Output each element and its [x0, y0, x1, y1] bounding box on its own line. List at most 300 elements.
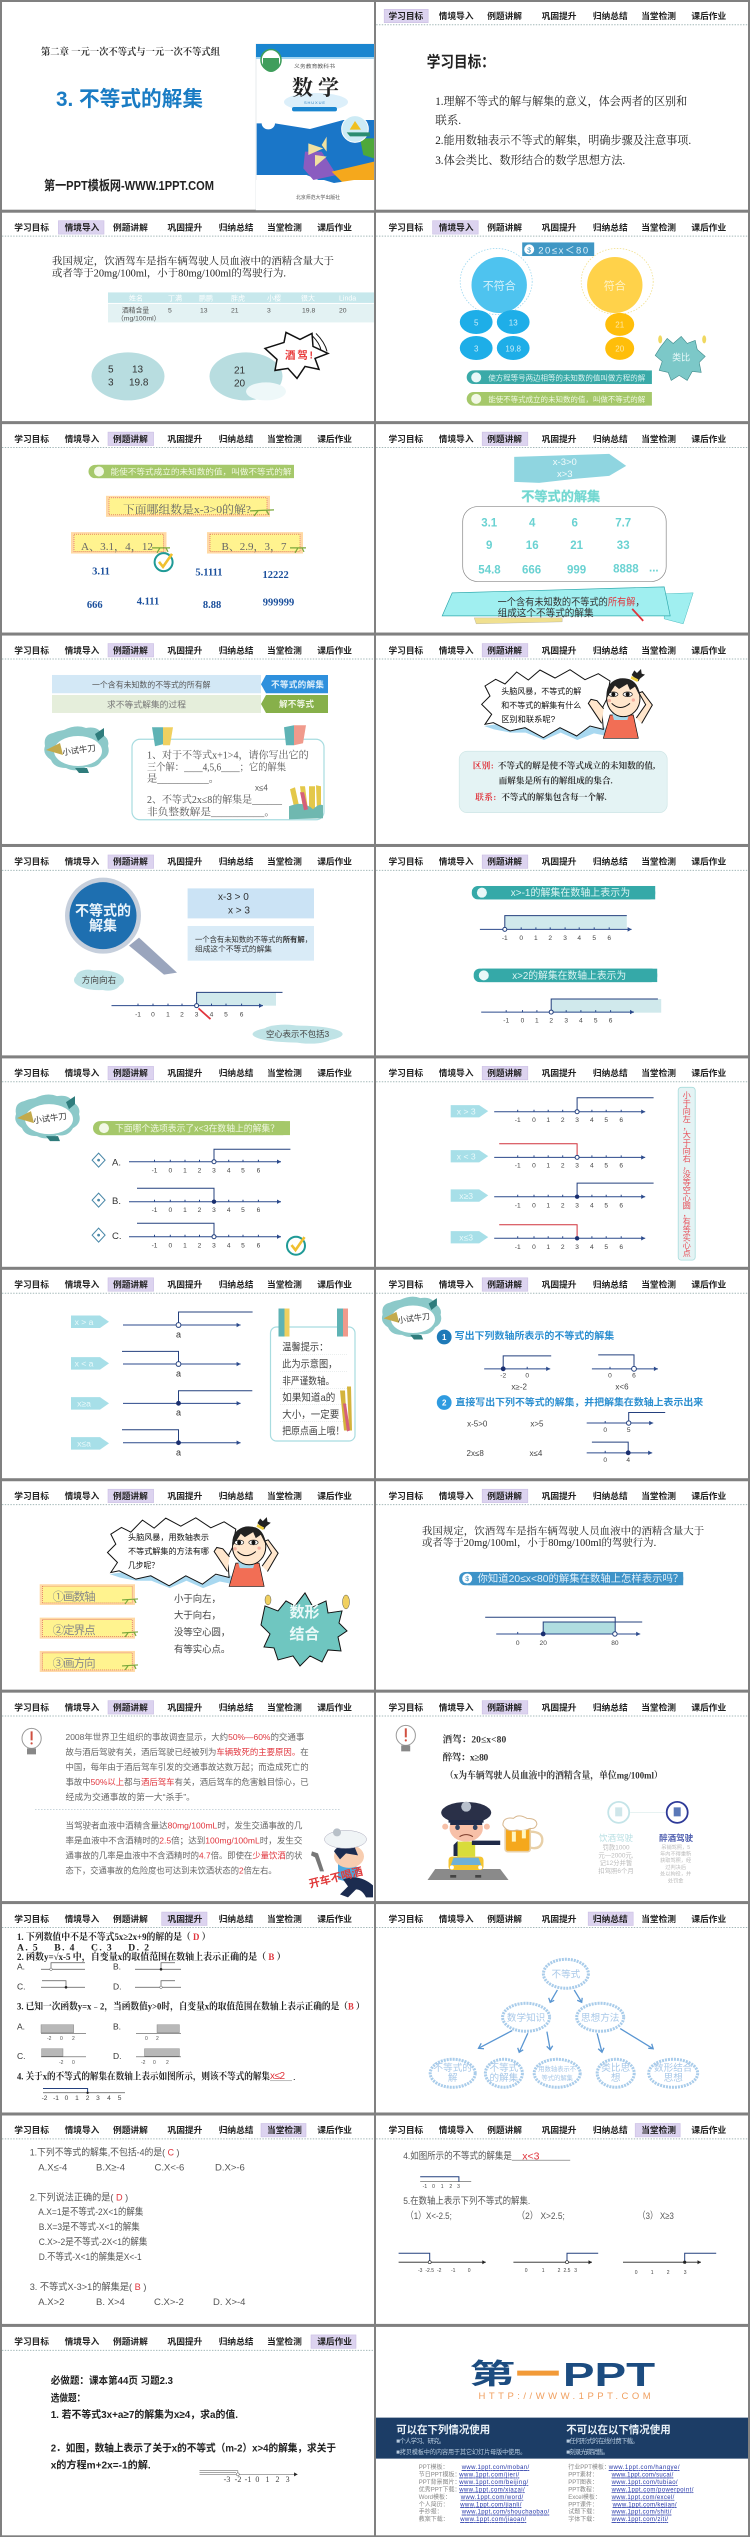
- link list right: PPT图表：: [568, 2478, 598, 2486]
- option A: 4: [227, 1168, 231, 1175]
- number line x greater than 3: 3: [195, 1012, 199, 1019]
- link list right: www.1ppt.com/sucai/: [611, 2473, 674, 2479]
- row: x at least a: x≥a: [77, 1399, 91, 1409]
- badge: try it: [382, 1297, 441, 1339]
- navigation bar: 学习目标: [14, 1490, 49, 1501]
- navigation bar: 学习目标: [389, 10, 424, 21]
- navigation bar: 课后作业: [691, 221, 726, 232]
- number line x at least -2: [484, 1356, 551, 1392]
- circle: matching: 符合: [604, 278, 626, 292]
- panel: slide 24 closing credits: [376, 2327, 748, 2535]
- number line x greater than 3: 5: [224, 1012, 228, 1019]
- node: solution set: [485, 2059, 522, 2087]
- test question 5: （2） X>2.5;: [517, 2210, 565, 2222]
- homework text: [51, 2374, 336, 2471]
- node: math knowledge: 数学知识: [507, 2012, 546, 2024]
- note card with exercises: 非负整数解是__________。: [147, 806, 275, 819]
- navigation bar: [376, 1278, 747, 1293]
- number line x greater than 5: 0: [603, 1427, 607, 1434]
- definitions: [443, 1733, 663, 1781]
- penalty text: drink driving: [598, 1833, 634, 1875]
- panel: slide 9 magnifier solution set: [2, 847, 374, 1055]
- question bar: $: [465, 1576, 469, 1583]
- rounded box of numbers: 9: [486, 540, 492, 552]
- number line x greater than 3: 4: [210, 1012, 214, 1019]
- navigation bar: 情境导入: [65, 1701, 100, 1712]
- number line x at most 4: 4: [626, 1457, 630, 1464]
- data table: [108, 292, 374, 322]
- rule text: [52, 254, 334, 279]
- question bar: 下面哪个选项表示了x<3在数轴上的解集？: [115, 1123, 279, 1134]
- bubble text: 头脑风暴，用数轴表示: [128, 1532, 209, 1542]
- group ellipse: not drunk: 3: [108, 377, 114, 388]
- link list right: 行业PPT模板：: [568, 2463, 610, 2471]
- option A: 6: [257, 1168, 261, 1175]
- number line x less than 6: [592, 1355, 658, 1392]
- data table: 姓名: [129, 293, 143, 302]
- logo: PPT: [563, 2356, 655, 2393]
- penalty text: drunk driving: 处以拘役，并: [660, 1869, 691, 1877]
- rounded box of numbers: 21: [570, 540, 584, 552]
- node: analogy thinking: 想: [611, 2072, 621, 2084]
- icon: pencils and book: [289, 785, 323, 819]
- navigation bar: 例题讲解: [113, 221, 148, 232]
- row: x at most 3: 4: [590, 1244, 594, 1251]
- navigation bar: 归纳总结: [219, 1279, 254, 1290]
- link list right: PPT素材：: [568, 2471, 598, 2479]
- row: x less than 3: 0: [532, 1163, 536, 1170]
- row: x less than 3: 2: [561, 1163, 565, 1170]
- number line x at least -2: x≥-2: [511, 1383, 527, 1392]
- homework text: 必做题：课本第44页 习题2.3: [51, 2374, 173, 2387]
- navigation bar: 学习目标: [14, 644, 49, 655]
- test question 3: C.X>-2: [154, 2297, 184, 2308]
- navigation bar: [376, 1701, 747, 1716]
- penalty text: drunk driving: 吊销驾照，5: [661, 1843, 690, 1851]
- number line x greater than -1: 6: [607, 935, 611, 942]
- navigation bar: 归纳总结: [219, 1490, 254, 1501]
- navigation bar: 例题讲解: [487, 221, 522, 232]
- badge: try it: 小试牛刀: [33, 1111, 67, 1125]
- option B box: B、2.9，3，7: [222, 541, 287, 553]
- link list left: Word模板：: [419, 2493, 451, 2501]
- navigation bar: 巩固提升: [168, 1913, 203, 1924]
- link list left: 节日PPT模板：: [419, 2471, 460, 2479]
- data table: 酒精含量: [122, 305, 149, 314]
- panel: slide 4 analogy circles: [376, 213, 748, 421]
- box: definition: 一个含有未知数的不等式的所有解，: [195, 934, 312, 944]
- question 3: 2: [72, 2036, 75, 2042]
- rule text: 或者等于20mg/100ml，小于80mg/100ml的驾驶行为.: [52, 266, 286, 279]
- navigation bar: 课后作业: [317, 1067, 352, 1078]
- navigation bar: 情境导入: [65, 1490, 100, 1501]
- node: number-shape thinking: 思想: [664, 2072, 683, 2084]
- icon: check mark: [287, 1237, 305, 1255]
- bubble text: [501, 686, 581, 724]
- box: inequality: x-3 > 0: [218, 892, 249, 903]
- row: x less than 3: 6: [619, 1163, 623, 1170]
- textbook cover: SHUXUE: [304, 100, 325, 105]
- answer panel: 不等式的解是使不等式成立的未知数的值,: [498, 759, 655, 770]
- node: number-shape thinking: [649, 2059, 698, 2087]
- navigation bar: 当堂检测: [267, 644, 302, 655]
- navigation bar: 当堂检测: [267, 1279, 302, 1290]
- navigation bar: [376, 1489, 747, 1505]
- row: x greater than 3: -1: [515, 1117, 521, 1124]
- option B: 0: [168, 1207, 172, 1214]
- icon: magnifier: [65, 878, 177, 975]
- node: solution set: 不等式: [490, 2062, 519, 2074]
- rule text: 或者等于20mg/100ml，小于80mg/100ml的驾驶行为.: [422, 1536, 656, 1549]
- number line x greater than -1: 5: [592, 935, 596, 942]
- option A box: [71, 532, 170, 554]
- navigation bar: 情境导入: [439, 1701, 474, 1712]
- blue solution numbers: 12222: [262, 570, 289, 581]
- question 4: 4: [107, 2095, 111, 2102]
- data table: 3: [267, 307, 271, 314]
- link list right: www.1ppt.com/kejian/: [612, 2502, 677, 2508]
- answer number line 2: [513, 2253, 598, 2274]
- penalty text: drink driving: 扣驾照6个月: [598, 1866, 634, 1875]
- burst: combine numbers and shapes: [261, 1593, 350, 1666]
- row: x at least 3: -1: [515, 1202, 521, 1209]
- number line x greater than 3: [112, 992, 282, 1019]
- navigation bar: 当堂检测: [641, 644, 676, 655]
- navigation bar: 当堂检测: [267, 1913, 302, 1924]
- icon: light bulb: [396, 1725, 415, 1751]
- group ellipse: not drunk: [92, 352, 164, 400]
- link list left: www.1ppt.com/word/: [460, 2495, 524, 2501]
- data table: Linda: [339, 295, 356, 302]
- panel: slide 12 four inequality forms: [376, 1058, 748, 1267]
- number line x greater than 2: 0: [521, 1017, 525, 1024]
- navigation bar: 学习目标: [14, 2336, 49, 2347]
- data table: 小樱: [267, 293, 281, 302]
- number line x greater than 2: 2: [549, 1017, 553, 1024]
- penalty text: drunk driving: 过判决后: [665, 1863, 686, 1871]
- row: x at least 3: 4: [590, 1202, 594, 1209]
- group ellipse: drunk: [210, 352, 286, 400]
- link list left: 个人简历：: [419, 2500, 449, 2508]
- navigation bar: [376, 1066, 747, 1082]
- row: solution set definition: 一个含有未知数的不等式的所有解: [92, 679, 210, 689]
- group ellipse: drunk: 21: [234, 365, 246, 376]
- badge: try it: 小试牛刀: [397, 1311, 431, 1325]
- answer number line 3: 3: [684, 2270, 687, 2276]
- box: inequality: x > 3: [228, 906, 250, 917]
- data table: （mg/100ml）: [117, 314, 160, 322]
- navigation bar: 例题讲解: [113, 1913, 148, 1924]
- navigation bar: 学习目标: [14, 1701, 49, 1712]
- row: x at most 3: 6: [619, 1244, 623, 1251]
- navigation bar: 例题讲解: [113, 1279, 148, 1290]
- note card: warm tip: 非严谨数轴。: [282, 1374, 334, 1387]
- panel: slide 11 multiple choice number lines: [2, 1058, 374, 1267]
- paragraph 2: 通事故的几率是血液中不含酒精时的4.7倍。即使在少量饮酒的状: [66, 1850, 303, 1860]
- row: x greater than 3: 1: [546, 1117, 550, 1124]
- rounded box of numbers: ...: [649, 562, 659, 574]
- note card with exercises: x≤4: [255, 783, 268, 792]
- row: x greater than a: a: [176, 1330, 181, 1340]
- number line x at most 4: 0: [603, 1457, 607, 1464]
- rule text: [174, 1593, 230, 1655]
- group ellipse: not drunk: 13: [132, 364, 144, 375]
- navigation bar: [2, 1701, 373, 1716]
- navigation bar: 课后作业: [691, 433, 726, 444]
- icon: light bulb: [22, 1728, 41, 1754]
- answer panel: 而解集是所有的解组成的集合.: [499, 774, 613, 785]
- node: solution set: 的解集: [490, 2072, 519, 2084]
- test question 2: B.X=3是不等式-X<1的解集: [39, 2221, 140, 2233]
- rounded box of numbers: [463, 507, 666, 582]
- link list right: PPT课件：: [568, 2500, 598, 2508]
- navigation bar: 巩固提升: [542, 1279, 577, 1290]
- option A: 1: [183, 1168, 187, 1175]
- icon: drink driving circle: [608, 1802, 665, 1823]
- test question 4: 1: [441, 2184, 444, 2190]
- navigation bar: 学习目标: [389, 856, 424, 867]
- navigation bar: 巩固提升: [168, 1701, 203, 1712]
- navigation bar: 情境导入: [439, 1279, 474, 1290]
- navigation bar: 情境导入: [65, 1279, 100, 1290]
- navigation bar: 巩固提升: [168, 2124, 203, 2135]
- navigation bar: 当堂检测: [641, 1913, 676, 1924]
- node: representation on axis: 用数轴表示不: [538, 2064, 577, 2073]
- link list right: www.1ppt.com/excel/: [611, 2495, 675, 2501]
- question bar: [93, 1121, 290, 1135]
- answer number line 3: 0: [635, 2270, 638, 2276]
- navigation bar: 例题讲解: [113, 1490, 148, 1501]
- navigation bar: 当堂检测: [267, 1701, 302, 1712]
- row: x at least 3: x≥3: [459, 1191, 473, 1201]
- illustration: police with beer: [428, 1802, 542, 1880]
- answer number line 2: 1: [542, 2268, 545, 2274]
- navigation bar: 例题讲解: [113, 2124, 148, 2135]
- paragraph 1: 故与酒后驾驶有关，酒后驾驶已经被列为车辆致死的主要原因。在: [66, 1747, 309, 1757]
- navigation bar: 当堂检测: [641, 1067, 676, 1078]
- row: x at most 3: 1: [546, 1244, 550, 1251]
- answer number line 1: -2.5: [425, 2268, 434, 2274]
- box: definition: [188, 926, 314, 961]
- row: x less than 3: 3: [575, 1163, 579, 1170]
- tag shape: [514, 454, 626, 483]
- navigation bar: 课后作业: [317, 644, 352, 655]
- inequality pairs: x>5: [530, 1419, 544, 1428]
- link list left: [419, 2463, 550, 2523]
- rounded box of numbers: 7.7: [615, 517, 631, 529]
- bar: x greater than 2: x>2的解集在数轴上表示为: [512, 969, 626, 982]
- row: x at least 3: 1: [546, 1202, 550, 1209]
- question 3: 2: [156, 2036, 159, 2042]
- icon: magnifier: 不等式的: [75, 903, 131, 919]
- paragraph 1: [66, 1732, 309, 1802]
- usage band: ■刻录光碟销售。: [566, 2447, 609, 2456]
- data table: 19.8: [302, 307, 315, 314]
- navigation bar: 当堂检测: [641, 10, 676, 21]
- option C: 0: [168, 1243, 172, 1250]
- navigation bar: 归纳总结: [219, 856, 254, 867]
- navigation bar: 巩固提升: [168, 856, 203, 867]
- test question 4: x<3: [522, 2151, 540, 2163]
- textbook cover: [256, 44, 374, 210]
- row: x at least 3: 2: [561, 1202, 565, 1209]
- definition bar: [88, 465, 294, 478]
- cloud: direction: 方向向右: [82, 974, 117, 985]
- test question 3: [30, 2281, 245, 2308]
- question box: 下面哪组数是x-3>0的解?: [123, 502, 251, 516]
- question 2: D.: [113, 1981, 122, 1991]
- note card: warm tip: [270, 1309, 355, 1441]
- question 2: [17, 1951, 286, 1991]
- navigation bar: 当堂检测: [267, 2336, 302, 2347]
- panel: slide 6 solution set numbers: [376, 424, 748, 633]
- test question 4: 0: [432, 2184, 435, 2190]
- small blue number circles: 3: [474, 344, 479, 353]
- speech bubble and girl: [482, 669, 652, 740]
- option B: 4: [227, 1207, 231, 1214]
- row: solving inequality: 求不等式解集的过程: [107, 698, 186, 709]
- number line 20 to 80: 20: [540, 1640, 547, 1647]
- link list left: 手抄报：: [419, 2508, 443, 2516]
- navigation bar: 情境导入: [439, 1490, 474, 1501]
- question bar: 你知道20≤x<80的解集在数轴上怎样表示吗？: [478, 1572, 683, 1585]
- node: number-shape thinking: 数形结合: [654, 2062, 693, 2074]
- navigation bar: 归纳总结: [593, 2124, 628, 2135]
- badge: try it: [15, 1094, 80, 1141]
- rounded box of numbers: 3.1: [481, 517, 498, 529]
- test question 3: A.X>2: [38, 2297, 64, 2308]
- note card with exercises: 1、对于不等式x+1>4，请你写出它的: [147, 748, 309, 761]
- navigation bar: 课后作业: [317, 221, 352, 232]
- vertical rule tag: [678, 1087, 695, 1260]
- blue solution numbers: 999999: [263, 597, 294, 608]
- navigation bar: 情境导入: [65, 856, 100, 867]
- question 4: 1: [75, 2095, 79, 2102]
- link list right: www.1ppt.com/ziti/: [611, 2517, 668, 2523]
- row: x at most a: x≤a: [77, 1439, 91, 1449]
- test question 4: 3: [457, 2184, 460, 2190]
- data table: 13: [200, 307, 208, 314]
- navigation bar: 例题讲解: [487, 2124, 522, 2135]
- rule text: 我国规定，饮酒驾车是指车辆驾驶人员血液中的酒精含量大于: [422, 1524, 704, 1537]
- number line x greater than 2: 6: [609, 1017, 613, 1024]
- navigation bar: 巩固提升: [542, 1490, 577, 1501]
- number line x greater than -1: 4: [577, 935, 581, 942]
- number line 20 to 80: 80: [611, 1640, 619, 1647]
- option A: 0: [168, 1168, 172, 1175]
- burst: analogy: 类比: [672, 351, 690, 362]
- number line x greater than 2: 1: [535, 1017, 539, 1024]
- number line x greater than 2: 4: [579, 1017, 583, 1024]
- test question 2: [30, 2192, 148, 2263]
- number line x at least -2: 0: [525, 1373, 529, 1380]
- step 1 heading: 写出下列数轴所表示的不等式的解集: [455, 1330, 615, 1342]
- test question 4: 2: [449, 2184, 452, 2190]
- bar: inequality solution definition: 能使不等式成立的未知数的值，叫做不等式的解: [488, 395, 646, 404]
- question 3: B.: [113, 2021, 121, 2031]
- question 2: B.: [113, 1961, 121, 1971]
- link list left: www.1ppt.com/moban/: [461, 2465, 530, 2471]
- penalty text: drink driving: 记12分并暂: [600, 1858, 633, 1867]
- data table: 21: [231, 307, 239, 314]
- banner definition: [442, 587, 693, 624]
- navigation bar: 学习目标: [14, 2124, 49, 2135]
- note card with exercises: 三个解：____4,5,6____；它的解集: [147, 760, 286, 773]
- note card: warm tip: 大小，一定要: [282, 1408, 339, 1421]
- group ellipse: not drunk: 19.8: [129, 377, 149, 388]
- option B: -1: [152, 1207, 158, 1214]
- circle: not matching: 不符合: [483, 278, 516, 292]
- navigation bar: [2, 2124, 373, 2139]
- inequality pairs: x≤4: [529, 1449, 543, 1458]
- goals list: [435, 94, 691, 167]
- number line 20 to 80: [485, 1617, 642, 1647]
- test question 5: 5.在数轴上表示下列不等式的解集.: [403, 2195, 530, 2207]
- step box 2: ②定界点: [53, 1623, 96, 1637]
- navigation bar: 学习目标: [389, 2124, 424, 2135]
- row: x greater than 3: x > 3: [457, 1107, 476, 1117]
- navigation bar: 学习目标: [14, 1279, 49, 1290]
- panel: slide 22 in-class test part 2: [376, 2116, 748, 2324]
- row: x at least 3: 5: [604, 1202, 608, 1209]
- navigation bar: 归纳总结: [219, 2124, 254, 2135]
- row: x greater than 3: 2: [561, 1117, 565, 1124]
- bubble text: 区别和联系呢?: [501, 714, 556, 724]
- inequality pairs: 2x≤8: [467, 1449, 484, 1458]
- row: x at most 3: 5: [604, 1244, 608, 1251]
- navigation bar: 当堂检测: [641, 1490, 676, 1501]
- step 2 heading: [437, 1395, 704, 1410]
- goals list: 联系.: [435, 113, 461, 127]
- row: x less than 3: 5: [604, 1163, 608, 1170]
- link list right: www.1ppt.com/hangye/: [608, 2465, 680, 2471]
- burst: combine numbers and shapes: 数形: [289, 1604, 320, 1621]
- node: math knowledge: [503, 2003, 550, 2031]
- rounded box of numbers: 999: [567, 564, 586, 576]
- link list right: www.1ppt.com/tubiao/: [611, 2480, 678, 2486]
- node: inequality: [543, 1959, 588, 1988]
- navigation bar: [376, 2124, 747, 2139]
- number line x at least -2: -2: [500, 1373, 506, 1380]
- option C: 3: [212, 1243, 216, 1250]
- question 4: .: [293, 2072, 296, 2082]
- icon: check mark: [155, 553, 173, 571]
- navigation bar: 课后作业: [317, 1913, 352, 1924]
- test question 1: B.X≥-4: [96, 2163, 125, 2174]
- panel: slide 5 which group is solution: [2, 424, 374, 633]
- panel: slide 16 drink driving on number line: [376, 1481, 748, 1690]
- textbook cover: 北京师范大学出版社: [296, 194, 340, 201]
- link list left: www.1ppt.com/xiazai/: [458, 2487, 525, 2493]
- navigation bar: 当堂检测: [641, 1701, 676, 1712]
- navigation bar: 巩固提升: [542, 1067, 577, 1078]
- note card: warm tip: 此为示意图，: [282, 1358, 337, 1371]
- paragraph 2: 当驾驶者血液中酒精含量达80mg/100mL时，发生交通事故的几: [66, 1820, 303, 1830]
- navigation bar: 巩固提升: [542, 644, 577, 655]
- navigation bar: 例题讲解: [487, 1701, 522, 1712]
- rounded box of numbers: 666: [522, 564, 541, 576]
- blue solution numbers: 8.88: [203, 600, 221, 611]
- badge: try it: [44, 726, 109, 773]
- link list left: www.1ppt.com/shouchaobao/: [461, 2510, 550, 2516]
- number line x less than 6: x<6: [615, 1383, 629, 1392]
- navigation bar: 课后作业: [691, 1490, 726, 1501]
- number line x greater than 2: [481, 999, 661, 1024]
- test question 5: （3） X≥3: [638, 2210, 674, 2222]
- row: x at most a: a: [176, 1448, 181, 1458]
- step box 2: [40, 1618, 138, 1639]
- navigation bar: 课后作业: [691, 644, 726, 655]
